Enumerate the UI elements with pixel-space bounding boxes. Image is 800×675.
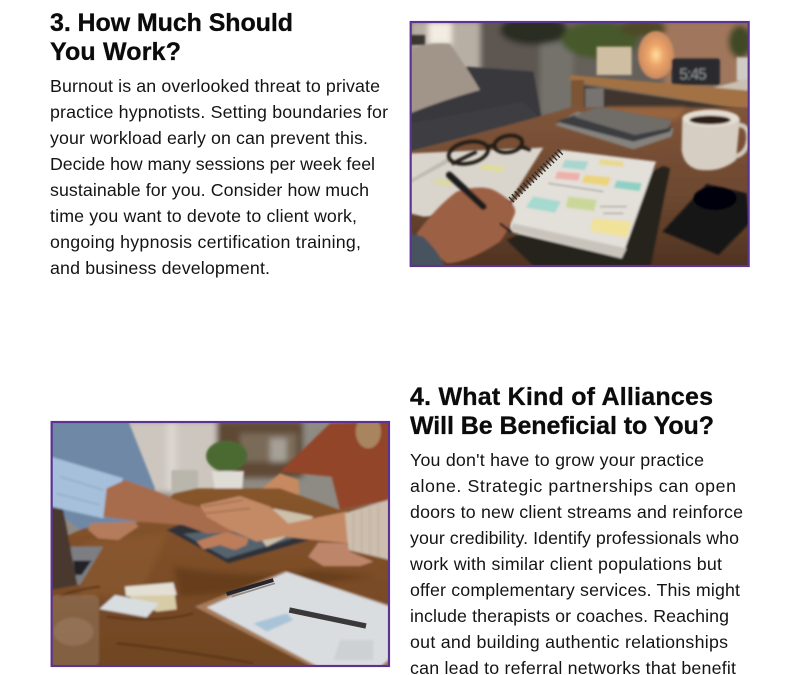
clipboard — [195, 571, 390, 667]
man's arm — [103, 480, 247, 533]
section 3 body text: Decide how many sessions per week feel — [50, 154, 375, 174]
shelf — [570, 75, 749, 110]
section 4 body text: include therapists or coaches. Reaching — [410, 606, 729, 626]
section 4 body text: work with similar client populations but — [409, 554, 722, 574]
phone — [663, 184, 749, 255]
section 3 heading — [50, 9, 293, 66]
notebook pages — [410, 148, 543, 217]
photo: planner on a wooden desk: 5:45 — [679, 66, 707, 83]
section 3 body text: sustainable for you. Consider how much — [50, 180, 369, 200]
woman's hand — [200, 496, 348, 543]
section 3 body text: practice hypnotists. Setting boundaries for — [50, 102, 388, 122]
section 4 heading — [410, 383, 714, 440]
section 4 body text: your credibility. Identify professionals who — [410, 528, 739, 548]
sleeve — [51, 457, 123, 518]
photo: stacked hands over a table — [51, 415, 390, 667]
pot and lamp — [597, 47, 632, 75]
woman's shirt and arm — [280, 421, 390, 510]
section 4 body text: out and building authentic relationships — [410, 632, 728, 652]
resting hand — [308, 543, 373, 566]
laptop — [71, 547, 103, 585]
clock — [672, 58, 720, 85]
section 4 heading: 4. What Kind of Alliances — [410, 383, 713, 411]
folder — [507, 166, 670, 266]
spiral — [508, 152, 561, 203]
tablet — [167, 522, 310, 563]
section 4 body text: doors to new client streams and reinforce — [410, 502, 743, 522]
section 3 body text: your workload early on can prevent this. — [50, 128, 368, 148]
lower fingers — [197, 532, 248, 550]
sofa — [412, 65, 542, 124]
glasses — [447, 133, 531, 167]
sweater — [345, 499, 390, 560]
plant and pot — [206, 441, 247, 471]
section 4 body text — [409, 450, 743, 675]
section 3 heading: 3. How Much Should — [50, 9, 293, 37]
section 3 body text — [50, 76, 388, 278]
photo: planner on a wooden desk — [410, 15, 752, 267]
sticky notes — [432, 159, 642, 237]
section 3 body text: time you want to devote to client work, — [50, 206, 357, 226]
table — [51, 488, 390, 667]
section 4 body text: alone. Strategic partnerships can open — [410, 476, 736, 496]
section 3 body text: and business development. — [50, 258, 270, 278]
section 3 body text: ongoing hypnosis certification training, — [50, 232, 361, 252]
section 4 body text: You don't have to grow your practice — [410, 450, 704, 470]
table — [410, 107, 749, 267]
hand — [417, 187, 515, 263]
section 4 heading: Will Be Beneficial to You? — [410, 412, 714, 440]
mug — [682, 118, 740, 170]
man's lower hand — [88, 522, 138, 540]
water glass — [51, 595, 99, 667]
section 3 heading: You Work? — [50, 38, 181, 66]
cards — [128, 594, 178, 614]
glass — [171, 470, 198, 502]
section 4 body text: offer complementary services. This might — [410, 580, 740, 600]
books — [555, 112, 673, 149]
section 3 body text: Burnout is an overlooked threat to private — [50, 76, 380, 96]
man's shirt — [51, 421, 155, 530]
